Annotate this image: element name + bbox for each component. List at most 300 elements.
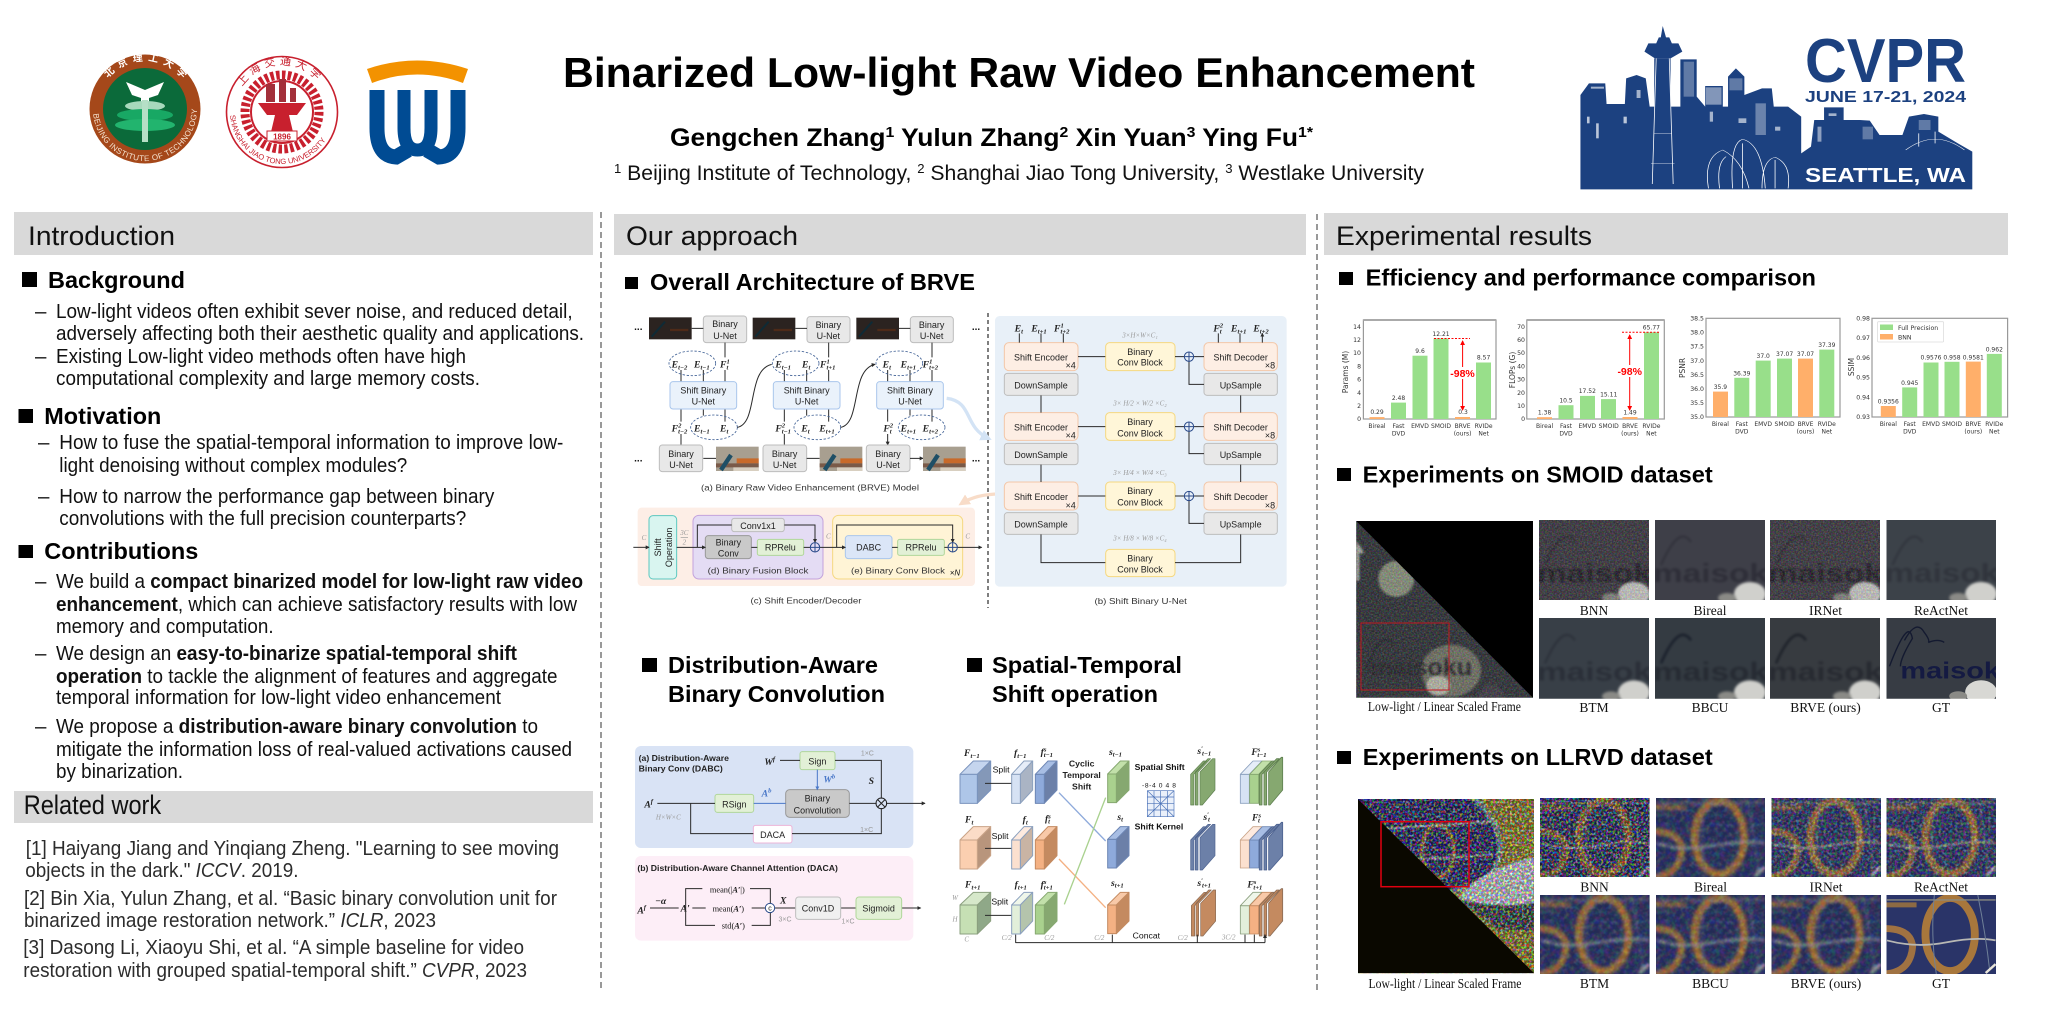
captions: LLRVD: Bireal [1694,880,1727,895]
panel: DABC: DACA [760,830,785,840]
crop: BRVE (ours) [1768,618,1884,699]
text block: references: binarized image restoration network.” ICLR, 2023 [24,909,436,932]
labels: s [1043,879,1047,886]
labels: Shift Kernel [1135,821,1183,831]
diagram: distribution-aware binary conv [635,746,925,941]
labels: f [1014,748,1017,759]
value labels: 0.945 [1901,380,1918,387]
decoders: Shift Decoder [1213,423,1268,433]
text block: contributions bullets: by binarization. [56,760,183,783]
captions: LLRVD: BRVE (ours) [1791,976,1861,991]
io labels: 1 [1060,323,1064,330]
boxes: binary u-net bottom: U-Net [773,460,797,470]
encoders: ×4 [1066,361,1076,371]
axis labels: 38.0 [1690,330,1704,337]
axis labels: FLOPs (G) [1508,352,1517,388]
cuboids s [1108,761,1129,934]
value labels [1538,324,1660,416]
binary conv blocks: Conv Block [1117,428,1163,438]
arrows: top row [681,328,932,445]
labels: ′ [1201,878,1203,885]
features labels lower: F [883,423,890,434]
axis labels: PSNR [1678,358,1687,378]
labels: f [1015,879,1018,890]
boxes: binary u-net bottom: Binary [772,449,798,459]
panel: DACA: std(A′) [722,922,745,931]
labels: t−1 [1257,752,1267,759]
downsample [1004,373,1078,534]
axis labels: SMOID [1942,421,1962,428]
panel: DACA: f [644,904,647,911]
binary conv block: RPRelu [906,543,936,553]
axis labels: 40 [1517,363,1525,370]
axis labels: 0 [1521,416,1525,423]
axis labels: DVD [1735,428,1749,436]
axis labels: EMVD [1578,423,1597,430]
axis labels: SSIM [1847,358,1856,376]
crop: BNN [1537,520,1653,600]
boxes: binary u-net top [634,316,980,343]
affiliations: Beijing Institute of Technology, [621,162,917,185]
logo: CVPR 2024 Seattle: JUNE 17-21, 2024 [1805,89,1966,106]
labels: C/2 [1002,934,1012,942]
text block: contributions bullets: – [35,715,47,738]
text block: contributions bullets: memory and computation. [56,615,274,638]
io labels: E [1031,324,1038,335]
arrows: to output frames [703,457,923,460]
channel labels: C [826,533,831,541]
reduction annotation: -98% [1450,368,1475,380]
axis labels: BRVE [1455,423,1471,430]
bars [1370,338,1491,419]
features labels upper: E [802,359,808,370]
panel: DABC: Convolution [794,805,841,815]
value labels: 1.38 [1538,410,1551,416]
encoders: ×4 [1066,431,1076,441]
panel: DABC [635,746,925,848]
section header: Experimental results: Experimental results [1336,221,1592,251]
dimension labels [1112,331,1167,543]
logo: Shanghai Jiao Tong University: SHANGHAI JIAO TONG UNIVERSITY [230,115,325,164]
axis labels: 36.0 [1690,386,1704,393]
axis labels: 10 [1353,350,1361,357]
panel: DACA: Conv1D [802,904,835,914]
captions: LLRVD: GT [1932,976,1951,991]
features labels upper: t−2 [678,364,688,371]
value labels: 35.9 [1714,384,1727,391]
labels: t [1258,818,1261,825]
axis labels: 37.5 [1690,344,1704,351]
features labels lower: t+1 [907,428,916,435]
panel: DABC: A [644,800,651,811]
text block: contributions bullets: We build a compact binarized model for low-light raw video [56,570,583,593]
labels: F [1252,813,1258,824]
labels: -8-4 0 4 8 [1142,782,1176,789]
axis labels: SMOID [1775,421,1795,428]
boxes: binary u-net bottom: ... [972,454,980,465]
features labels lower: t+1 [826,428,835,435]
features labels upper: 1 [929,358,932,365]
axis labels: 0.98 [1856,316,1870,322]
shifted stacks s prime [1191,759,1216,936]
labels: t−1 [1202,751,1211,758]
value labels: 12.21 [1432,331,1450,338]
captions: LLRVD: ReActNet [1914,880,1968,895]
binary conv block: ×N [950,568,960,577]
panel: DACA: mean(A′) [713,905,744,914]
features labels upper: E [901,359,907,370]
features labels lower: E [923,423,929,434]
logo: Shanghai Jiao Tong University: 上海交通大学 [238,57,322,86]
labels: Spatial Shift [1135,762,1185,772]
section header: Our approach [614,214,1306,255]
axis labels: RVIDe [1985,421,2004,428]
features labels upper: E [672,359,678,370]
labels: t−1 [1017,753,1026,760]
features labels lower: 2 [889,422,894,429]
boxes: binary u-net top: ... [634,322,643,333]
dimension labels: 3× H/8 × W/8 ×C₄ [1112,535,1167,543]
axis labels: 70 [1517,324,1525,331]
panel: DACA: c [768,906,772,913]
panel: DABC: A [762,789,768,800]
features labels lower: F [775,423,782,434]
bars [1713,350,1834,417]
axis labels: SMOID [1431,423,1451,430]
text block: contributions bullets: – [35,570,47,593]
labels: f [1023,815,1026,826]
axis labels [1341,324,1493,438]
bars [1537,332,1659,419]
axis labels: 30 [1517,377,1525,384]
labels: t+1 [1044,884,1053,891]
shift kernel grid [1147,791,1174,817]
captions: SMOID: GT [1932,700,1951,715]
axis labels: 12 [1353,337,1361,344]
value labels [1878,346,2003,406]
value labels: 10.5 [1559,398,1573,404]
crops: SMOID results [1533,514,2002,704]
axis labels: 8 [1357,363,1361,370]
affiliations: 3 [1225,161,1233,176]
authors: Gengchen Zhang [670,124,874,152]
decoders: ×8 [1265,431,1275,441]
axis labels: 38.5 [1690,316,1704,322]
section header: Related work: Related work [24,790,162,820]
value labels: 17.52 [1579,388,1596,395]
axis labels: Params (M) [1341,351,1350,393]
legend: Full Precision [1898,325,1938,332]
labels: C/2 [1178,934,1188,942]
io labels: F [1054,324,1060,335]
arrow: to shift encoder [962,494,1000,503]
text block: background bullets: – [35,300,47,323]
labels: 3C/2 [1221,933,1236,941]
labels: t+1 [1018,884,1027,891]
boxes: binary u-net bottom: Binary [875,449,901,459]
boxes: shift binary u-net: Shift Binary [784,386,830,396]
binary conv block: (e) Binary Conv Block [851,565,946,575]
axis labels [1678,316,1836,436]
section header: Introduction: Introduction [28,221,175,251]
shift operation box: Shift [653,538,663,556]
axis labels: Fast [1392,423,1405,430]
text block: contributions bullets: – [35,642,47,665]
arrow: to shift u-net [947,398,988,438]
crop: ReActNet: maisok [1885,560,2000,588]
panel: DACA: −α [655,896,667,907]
text block: motivation bullets: convolutions with the full precision counterparts? [59,507,466,530]
labels: s [1197,878,1201,889]
labels: Concat [1133,930,1161,940]
diagram: spatial-temporal shift [951,746,1283,944]
io labels: E [1015,324,1021,335]
crop: Bireal: maisok [1653,558,1769,588]
panel: DABC: f [773,756,776,763]
red highlight box SMOID [1361,623,1449,690]
value labels: 15.11 [1600,392,1617,398]
features labels upper: E [883,359,889,370]
text block: background bullets: adversely affecting both their aesthetic quality and applications. [56,322,584,345]
panel: DABC: b [832,774,836,781]
value labels [1370,331,1490,416]
shift cuboids fs [1035,761,1057,934]
adders [1184,352,1194,501]
text block: motivation bullets: – [38,485,50,508]
features labels upper: E [775,359,782,370]
features labels upper: t [808,364,811,371]
axis labels: 0.95 [1856,375,1870,382]
boxes: binary u-net top: Binary [919,320,945,330]
labels: t [1121,817,1124,824]
panel: DABC: b [768,788,772,795]
authors: Xin Yuan [1068,124,1187,152]
value labels [1714,342,1836,391]
binary conv blocks: Binary [1127,417,1153,427]
divider: inner architecture [987,313,989,608]
crops: LLRVD results [1535,792,2001,980]
axis labels: DVD [1559,430,1573,438]
labels: s [1117,812,1121,823]
boxes: shift binary u-net: Shift Binary [680,386,727,396]
text block: background bullets: computational complexity and large memory costs. [56,367,480,390]
logo: CVPR 2024 Seattle: CVPR [1805,27,1966,96]
connections [751,546,948,549]
legend: BNN [1898,334,1912,342]
labels: C/2 [1094,934,1105,942]
axis labels: 35.5 [1690,400,1704,407]
crop: BNN: maisok [1537,558,1653,588]
labels: s [1257,747,1261,754]
decoders: ×8 [1265,500,1275,510]
binary fusion block [693,515,823,579]
crop: IRNet: maisok [1768,558,1884,588]
text block: contributions bullets: mitigate the information loss of real-valued activations caused [56,738,572,761]
authors: Ying Fu [1195,124,1298,152]
features labels lower: E [694,423,700,434]
captions: LLRVD [1368,880,1968,991]
features labels upper: t−1 [700,364,710,371]
panel: DABC: H×W×C [655,813,681,821]
legend [1878,322,1944,342]
subheading: Experiments on SMOID dataset: Experiments on SMOID dataset [1363,462,1713,488]
binary fusion block: Conv1x1 [740,521,776,531]
features labels lower: t−1 [782,428,791,435]
features labels upper: 1 [826,358,830,365]
subheading: Distribution-Aware Binary Convolution: Binary Convolution [668,681,885,707]
features labels lower: 2 [781,422,786,429]
channel labels: C [965,533,970,541]
panel: DACA: 1×C [841,919,855,926]
adders [810,543,957,552]
value labels: 37.07 [1776,351,1793,358]
binary conv block [833,515,963,579]
features labels lower: t−2 [678,428,688,435]
axis labels: 0.94 [1856,394,1870,402]
value labels: 9.6 [1415,348,1425,355]
io labels [1014,323,1269,336]
axis labels: Bireal [1536,423,1554,430]
captions: SMOID: BRVE (ours) [1790,700,1861,715]
labels: t−1 [1113,752,1122,759]
labels: s [1257,812,1261,819]
features labels lower: F [672,423,678,434]
reduction annotation [1434,338,1475,410]
panel: DABC: 1×C [860,827,873,834]
labels: s [1253,879,1257,886]
value labels: 37.39 [1818,342,1836,349]
panel: DABC: Sign [808,757,826,767]
axis labels: Fast [1736,421,1748,428]
panel: DACA: Sigmoid [862,904,895,914]
captions: SMOID: ReActNet [1914,603,1968,618]
subheading: Motivation: Motivation [44,403,161,429]
labels: t+1 [1202,883,1211,890]
features labels lower: t [890,428,893,435]
decoders: Shift Decoder [1213,492,1268,502]
captions: LLRVD: Low-light / Linear Scaled Frame [1368,976,1522,991]
crop: GT: maisok [1900,657,2000,683]
binary conv blocks: Binary [1127,486,1153,496]
axis labels: RVIDe [1642,423,1661,430]
value labels: 0.3 [1458,409,1468,416]
io labels: t [1021,329,1024,336]
panel: DABC: W [764,757,773,768]
crop: BRVE (ours) [1772,895,1881,974]
image: SMOID low-light frame [1356,521,1533,698]
encoders: Shift Encoder [1014,492,1068,502]
text block: contributions bullets: temporal information for low-light video enhancement [56,686,501,709]
axis labels: EMVD [1922,421,1940,428]
labels: t [1048,819,1051,826]
labels: Split [992,831,1009,841]
io labels: t+2 [1060,329,1070,336]
captions: LLRVD: BBCU [1692,976,1729,991]
logo: CVPR 2024 Seattle: SEATTLE, WA [1805,165,1966,187]
text block: contributions bullets [35,570,583,783]
labels: Split [991,897,1009,907]
labels: t−1 [970,753,980,760]
value labels: 2.48 [1392,395,1405,402]
diagram: shift binary u-net [995,316,1287,606]
split cuboids f [1012,761,1033,934]
labels: t+1 [1253,884,1262,891]
encoders: ×4 [1066,500,1076,510]
labels: t+1 [971,884,980,891]
crop: BBCU [1653,618,1769,699]
axis labels: 20 [1517,390,1525,397]
encoders: Shift Encoder [1014,353,1068,363]
axis labels: 36.5 [1690,372,1704,379]
section header: Experimental results [1324,213,2008,255]
encoders: Shift Encoder [1014,423,1068,433]
labels: Temporal [1063,770,1101,780]
axis labels: 4 [1357,390,1361,397]
subheading: Spatial-Temporal Shift operation: Spatial-Temporal [992,652,1182,678]
features labels upper: t−1 [782,364,791,371]
boxes: binary u-net top: Binary [712,319,738,329]
title: Binarized Low-light Raw Video Enhancement [563,49,1475,96]
crop: BTM: maisok [1537,656,1653,686]
diagram: BRVE model and shift encoder [633,316,1000,605]
channel labels: C [642,534,647,542]
authors: 1 [886,124,894,141]
value labels: 0.9581 [1963,354,1984,362]
labels: s [1197,746,1201,757]
binary conv blocks: Conv Block [1117,564,1163,574]
panel: DABC: RSign [722,799,747,809]
boxes: binary u-net top: U-Net [713,331,737,341]
channel labels: 3C [679,529,689,537]
value labels: 8.57 [1477,354,1490,362]
text block: contributions bullets: We design an easy-to-binarize spatial-temporal shift [56,642,517,665]
io labels: t+1 [1237,329,1246,336]
boxes: binary u-net bottom: ... [634,454,643,465]
axis labels: (ours) [1621,430,1639,438]
panel: DACA: mean(|A′|) [710,885,745,894]
labels: t [1208,817,1211,824]
panel: DACA: X [779,895,787,906]
panel: DABC: 1×C [861,751,874,758]
authors: 1* [1298,124,1313,141]
features labels upper: F [923,359,929,370]
crop: IRNet [1768,520,1884,600]
chart: SSIM [1847,316,2008,436]
panel: DACA: A′ [680,904,690,915]
binary conv blocks [1106,343,1175,577]
authors: 3 [1187,124,1195,141]
binary fusion block: Conv [718,549,739,559]
crop: GT [1886,618,2000,699]
text block: contributions bullets: enhancement, which can achieve satisfactory results with low [56,593,577,616]
input cuboids F [960,761,991,934]
cyclic shift lines [1059,793,1106,908]
boxes: shift binary u-net: U-Net [795,397,819,407]
crop: BTM [1540,895,1650,974]
axis labels [1508,324,1661,438]
axis labels [1847,316,2004,436]
panel: DABC: W [823,775,832,786]
text block: motivation bullets: – [38,431,50,454]
features labels upper: t+2 [929,364,939,371]
axis labels: Fast [1904,421,1916,428]
boxes: binary u-net top: Binary [816,320,842,330]
red highlight box LLRVD [1381,822,1469,887]
column divider left [600,212,602,992]
reduction annotation [1617,332,1660,410]
binary fusion block: RPRelu [765,543,796,553]
logo: Shanghai Jiao Tong University: 1896 [273,132,291,142]
